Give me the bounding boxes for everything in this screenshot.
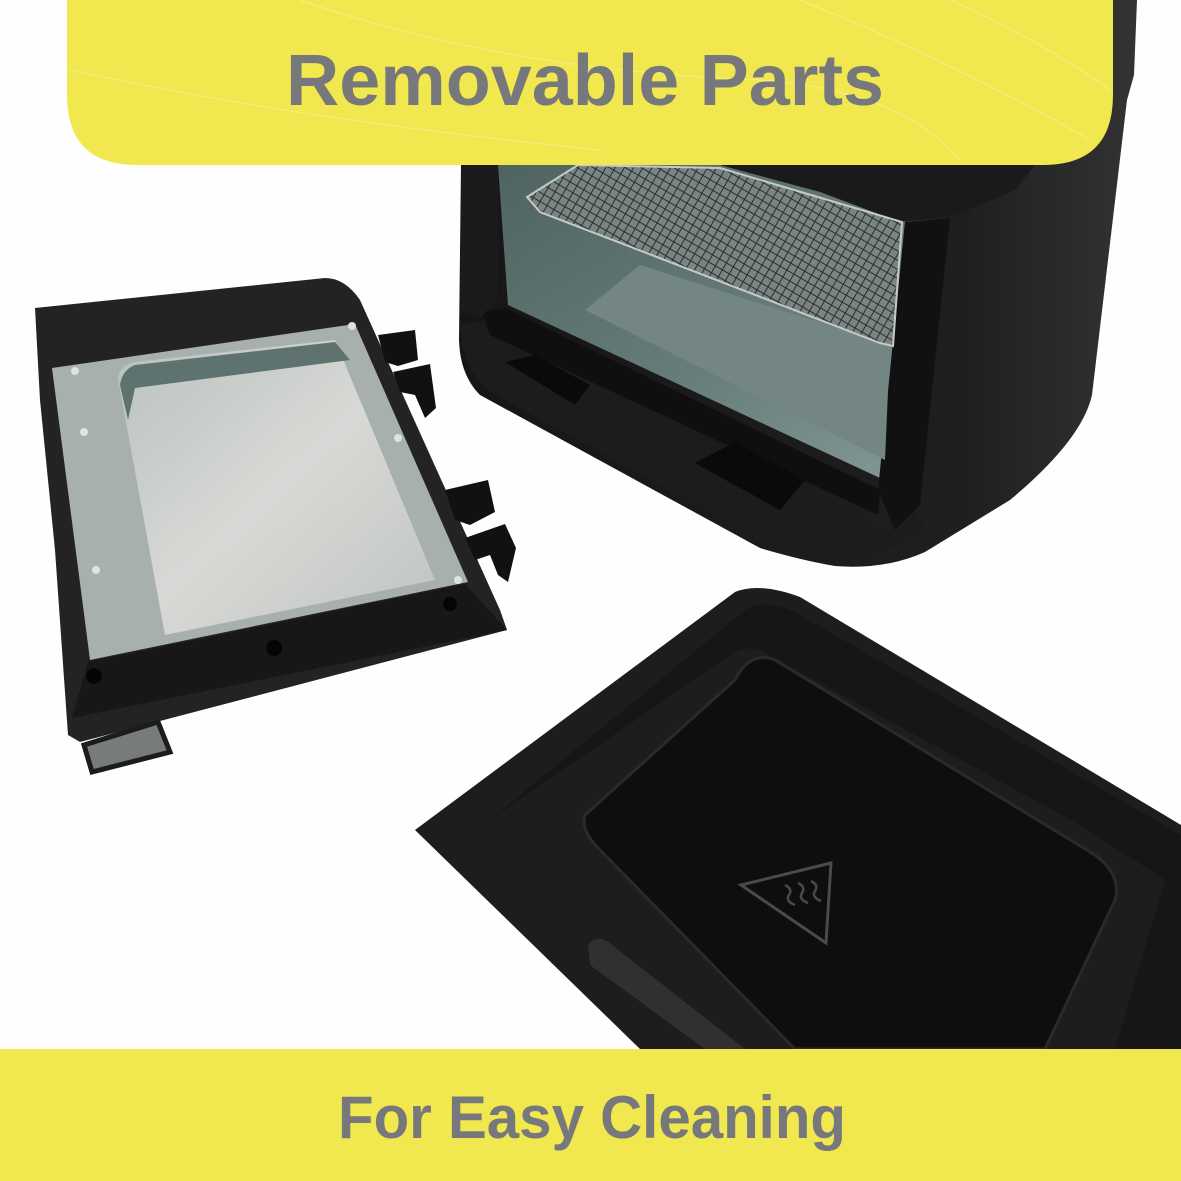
footer band [0, 1049, 1181, 1181]
tray recess [584, 658, 1116, 1049]
tray inner raised rim [490, 604, 1181, 1049]
oven cavity [498, 165, 1030, 478]
door clips [378, 330, 516, 582]
screw holes [86, 597, 457, 684]
banner shape [67, 0, 1113, 165]
clip lower 1 [445, 480, 495, 525]
mesh rack [527, 165, 902, 346]
clip upper 1 [378, 330, 418, 366]
drip tray [415, 588, 1181, 1049]
plate screws [71, 322, 462, 584]
tray handle [588, 938, 745, 1049]
door hinge right [695, 442, 805, 510]
door frame right [878, 218, 950, 530]
title: Removable Parts [286, 41, 884, 121]
fryer body [459, 0, 1137, 567]
door bottom bar [72, 584, 507, 718]
door sill [482, 308, 880, 515]
door hinge left [505, 355, 590, 405]
warning triangle [741, 863, 831, 943]
cavity floor [585, 265, 890, 460]
upper housing lip [720, 165, 1035, 222]
door glass window [118, 340, 435, 635]
subtitle: For Easy Cleaning [338, 1084, 846, 1151]
heat waves [785, 881, 821, 905]
clip upper 2 [393, 364, 436, 418]
left door post [461, 165, 498, 318]
air fryer [459, 0, 1137, 567]
door frame [35, 278, 507, 742]
header banner [67, 0, 1113, 165]
door glass plate [52, 324, 468, 660]
glass top reflection [120, 342, 350, 420]
clip lower 2 [465, 524, 516, 582]
tray outer [415, 588, 1181, 1049]
fryer base rim [460, 320, 925, 557]
removable door [35, 278, 516, 772]
door foot [84, 722, 170, 772]
footer background [0, 1049, 1181, 1181]
